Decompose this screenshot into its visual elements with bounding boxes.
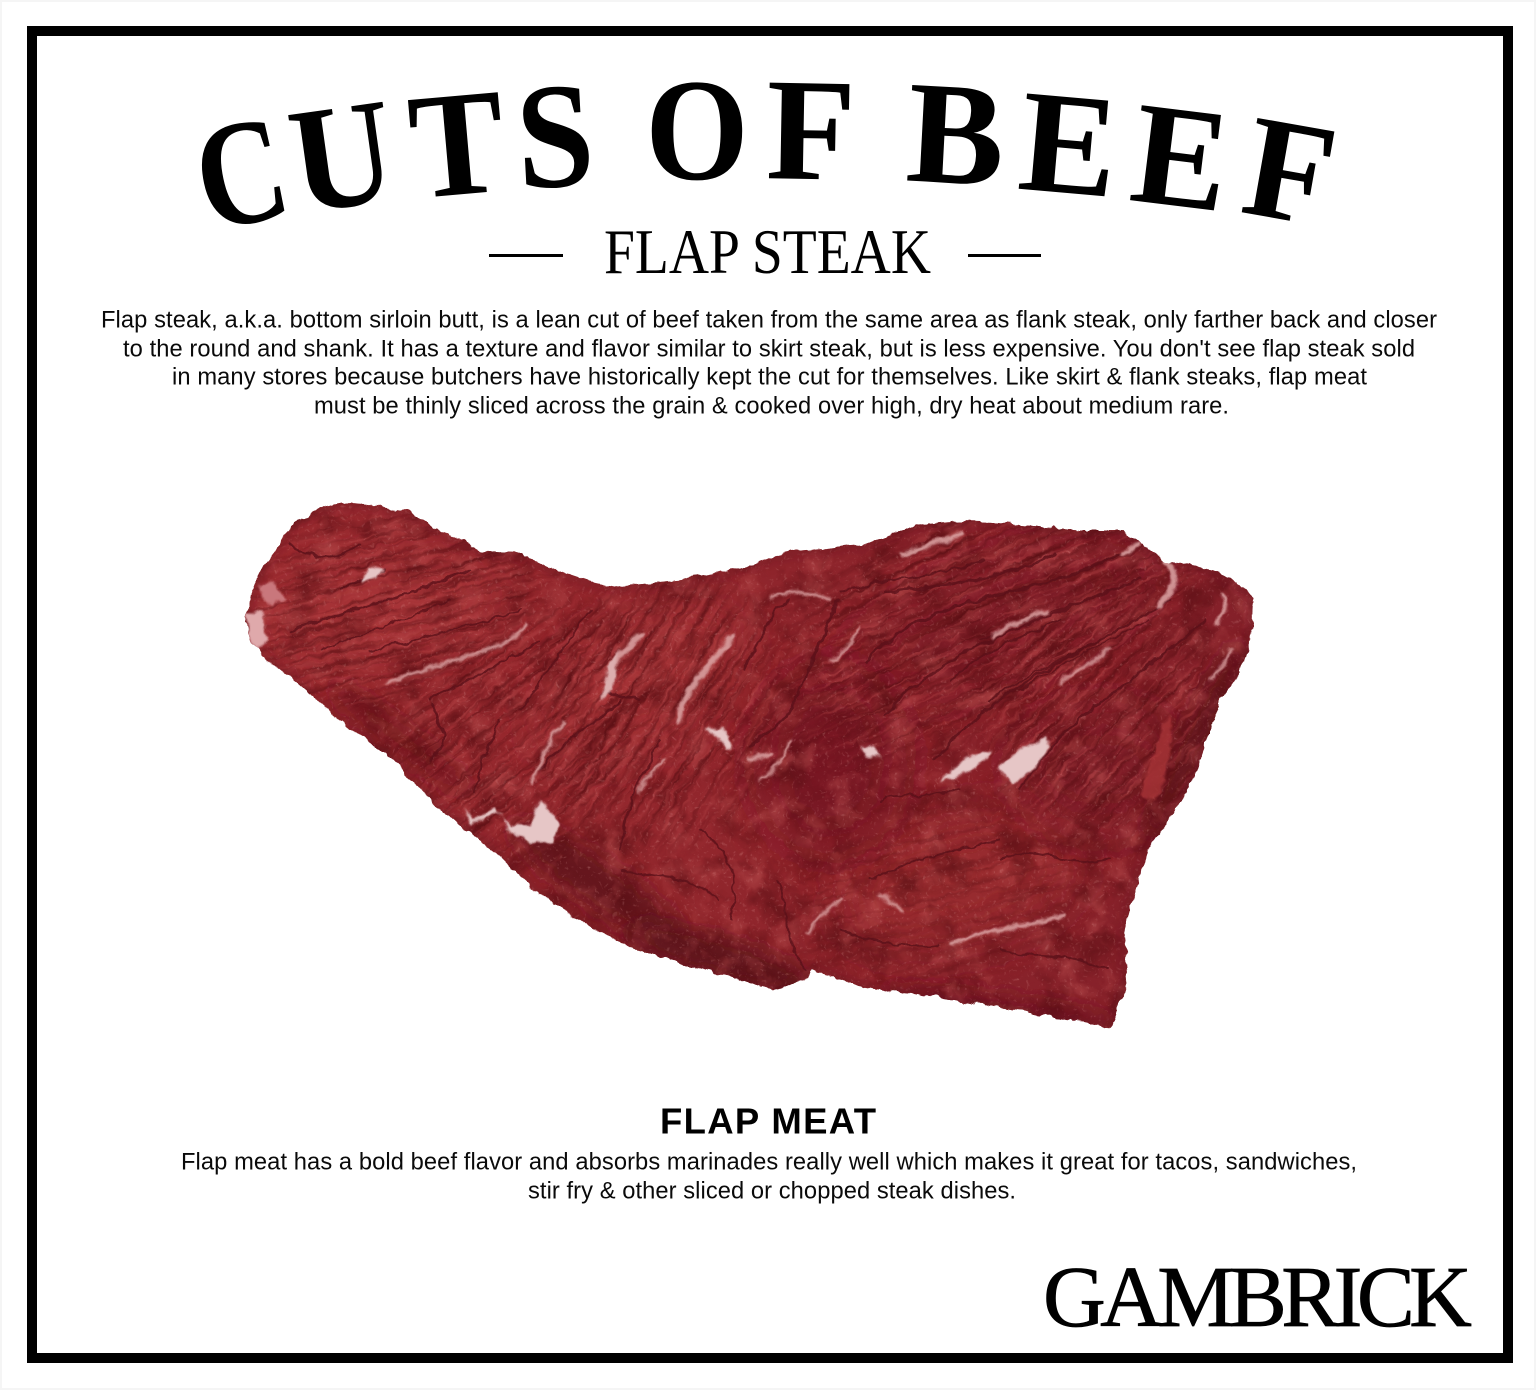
title: cuts of beef, arched: S: [512, 51, 598, 221]
text block: flap steak description: must be thinly sliced across the grain & cooked over high, dry heat about medium rare.: [314, 394, 1229, 420]
subtitle: flap steak with side rules: FLAP STEAK: [604, 216, 931, 287]
title: cuts of beef, arched: [180, 48, 1347, 240]
lighter red band on right edge: [1141, 714, 1171, 800]
text block: flap steak description: Flap steak, a.k.a. bottom sirloin butt, is a lean cut of beef taken from the same area as flank steak, only farther back and closer: [101, 308, 1437, 334]
title: cuts of beef, arched: F: [765, 48, 857, 212]
text block: flap steak description: in many stores because butchers have historically kept the cut for themselves. Like skirt & flank steaks, flap meat: [172, 364, 1367, 390]
text block: flap meat description: [181, 1150, 1357, 1204]
fat and silverskin streaks: [387, 534, 1232, 945]
muscle fibre texture by region: [245, 502, 1225, 980]
text block: flap meat description: Flap meat has a bold beef flavor and absorbs marinades really well which makes it great for tacos, sandwiches,: [181, 1150, 1357, 1176]
white fat patches: [246, 567, 1048, 843]
text block: flap steak description: [101, 308, 1437, 420]
heading: flap meat: FLAP MEAT: [660, 1100, 876, 1142]
dark muscle separation lines: [290, 545, 1205, 970]
brand logo: gambrick: GAMBRICK: [1043, 1248, 1472, 1345]
image: raw flap steak cut of beef: [244, 502, 1254, 1028]
title: cuts of beef, arched: E: [1013, 59, 1125, 229]
text block: flap meat description: stir fry & other sliced or chopped steak dishes.: [528, 1178, 1016, 1204]
title: cuts of beef, arched: T: [403, 57, 511, 231]
rim shading: [245, 503, 1254, 1027]
tonal areas: [255, 510, 1256, 1037]
text block: flap steak description: to the round and shank. It has a texture and flavor similar to skirt steak, but is less expensive. You don't see flap steak sold: [123, 336, 1415, 362]
lumpy surface texture: [230, 490, 1270, 1040]
title: cuts of beef, arched: O: [645, 49, 749, 211]
subtitle: flap steak with side rules: [489, 216, 1041, 287]
title: cuts of beef, arched: E: [1124, 71, 1238, 240]
title: cuts of beef, arched: B: [903, 51, 1009, 217]
